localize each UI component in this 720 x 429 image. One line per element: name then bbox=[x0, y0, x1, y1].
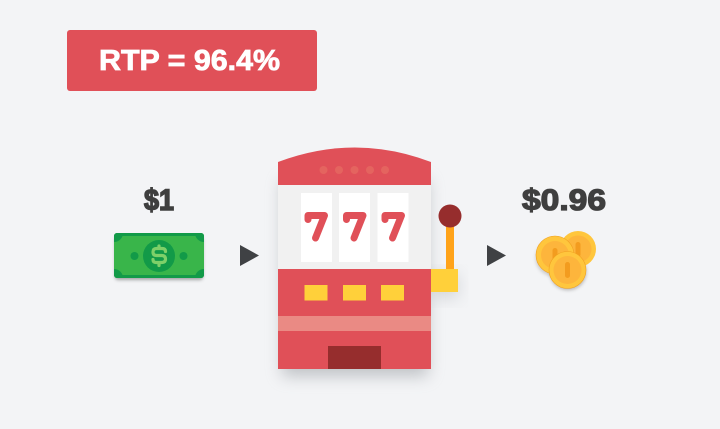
icon: coins bbox=[536, 231, 596, 290]
machine body bbox=[278, 269, 431, 369]
title badge: RTP: RTP = 96.4% bbox=[99, 45, 280, 77]
indicator lights bbox=[320, 166, 389, 174]
icon: dollar bill bbox=[113, 233, 205, 282]
coin tray bbox=[328, 346, 381, 369]
title badge: RTP bbox=[67, 30, 317, 91]
label: input amount: $1 bbox=[144, 184, 174, 217]
machine top bbox=[278, 148, 431, 186]
arrow: machine to coins bbox=[487, 245, 506, 266]
reel window bbox=[278, 185, 431, 269]
lever bbox=[431, 204, 462, 292]
label: output amount: $0.96 bbox=[522, 184, 606, 217]
front coin bbox=[549, 252, 586, 288]
left coin bbox=[536, 236, 574, 274]
infographic bbox=[67, 30, 606, 384]
stripe bbox=[278, 316, 431, 331]
back coin bbox=[560, 231, 596, 267]
buttons bbox=[304, 285, 404, 300]
slot machine bbox=[278, 148, 462, 376]
reels bbox=[301, 193, 408, 262]
arrow: bill to machine bbox=[240, 245, 259, 266]
